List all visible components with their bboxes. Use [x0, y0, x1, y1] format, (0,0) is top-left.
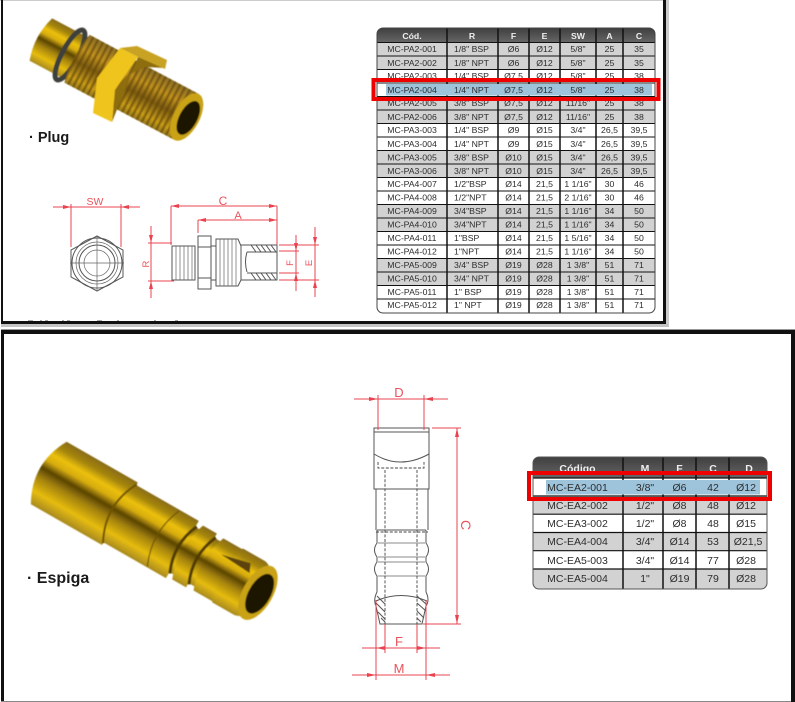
table rows: 25: [605, 85, 614, 95]
table rows: 51: [605, 300, 614, 310]
table rows: Ø12: [536, 44, 553, 54]
table rows: 25: [605, 112, 614, 122]
diagram: plug side view with dimensions: C: [219, 194, 228, 208]
table rows: Ø19: [505, 287, 522, 297]
table rows: Ø28: [736, 555, 756, 567]
table rows: 3/8" NPT: [454, 166, 490, 176]
diagram: plug side view with dimensions: [141, 194, 319, 298]
diagram: espiga section with dimensions: [352, 385, 474, 680]
table rows: Ø12: [736, 500, 756, 512]
table rows: MC-PA2-006: [387, 112, 437, 122]
table rows: 5/8": [570, 71, 586, 81]
table header: [402, 31, 643, 41]
table rows: Ø19: [670, 573, 690, 585]
table rows: 34: [605, 206, 614, 216]
panel: plug: [0, 0, 669, 327]
table rows: 38: [634, 112, 644, 122]
table rows: 50: [634, 206, 644, 216]
table rows: 34: [605, 233, 614, 243]
table rows: Ø12: [736, 482, 756, 494]
table rows: 46: [634, 179, 644, 189]
table rows: 5/8": [570, 85, 586, 95]
table rows: 3/4": [570, 166, 586, 176]
table rows: Ø12: [536, 58, 553, 68]
table rows: 21,5: [536, 246, 553, 256]
table rows: Ø15: [736, 518, 756, 530]
table rows: MC-PA2-001: [387, 44, 437, 54]
table rows: MC-PA5-009: [387, 260, 437, 270]
table rows: 77: [707, 555, 719, 567]
panel: espiga: [1, 329, 795, 702]
table rows: 3/4" BSP: [454, 260, 489, 270]
table rows: Ø28: [536, 287, 553, 297]
table rows: Ø12: [536, 112, 553, 122]
table rows: Ø10: [505, 152, 522, 162]
table rows: Ø15: [536, 139, 553, 149]
table header: R: [469, 31, 476, 41]
table rows: 3/4": [636, 536, 654, 548]
table rows: 1/8" NPT: [454, 58, 490, 68]
table rows: 1/8" BSP: [454, 44, 489, 54]
table rows: Ø12: [536, 85, 553, 95]
table rows: MC-PA4-012: [387, 246, 437, 256]
table rows: 48: [707, 500, 719, 512]
table rows: MC-EA2-002: [547, 500, 608, 512]
table rows: MC-PA2-004: [387, 85, 437, 95]
table rows: 3/4": [570, 152, 586, 162]
table rows: Ø12: [536, 98, 553, 108]
table rows: 53: [707, 536, 719, 548]
table rows: Ø14: [505, 192, 522, 202]
table: plug specifications: [377, 28, 655, 313]
table rows: 1/2"BSP: [454, 179, 487, 189]
table rows: 11/16": [566, 112, 590, 122]
table rows: 21,5: [536, 220, 553, 230]
table rows: MC-PA5-012: [387, 300, 437, 310]
table rows: 79: [707, 573, 719, 585]
table rows: Ø7,5: [504, 98, 523, 108]
table rows: Ø7,5: [504, 71, 523, 81]
table header: F: [676, 463, 683, 475]
table rows: Ø15: [536, 152, 553, 162]
table rows: MC-PA5-010: [387, 274, 437, 284]
table rows: 30: [605, 192, 614, 202]
table rows: 25: [605, 98, 614, 108]
table header: C: [709, 463, 717, 475]
table rows: [546, 480, 762, 585]
table rows: MC-EA4-004: [547, 536, 608, 548]
table rows: Ø6: [508, 58, 519, 68]
table rows: 51: [605, 287, 614, 297]
table rows: 30: [605, 179, 614, 189]
table rows: MC-PA3-005: [387, 152, 437, 162]
table rows: 11/16": [566, 98, 590, 108]
table rows: MC-EA2-001: [547, 482, 608, 494]
icon: brass hose barb fitting: [22, 437, 289, 631]
label: Plug: · Plug: [29, 130, 69, 146]
table rows: Ø14: [505, 246, 522, 256]
diagram: plug side view with dimensions: R: [141, 260, 152, 267]
table rows: 1" NPT: [454, 300, 482, 310]
table rows: 38: [634, 85, 644, 95]
table rows: Ø28: [736, 573, 756, 585]
table rows: 51: [605, 274, 614, 284]
table rows: Ø15: [536, 166, 553, 176]
table rows: MC-PA2-002: [387, 58, 437, 68]
table rows: 3/4"NPT: [454, 220, 487, 230]
table rows: 3/8" BSP: [454, 152, 489, 162]
table rows: MC-PA3-004: [387, 139, 437, 149]
table rows: 3/8" BSP: [454, 98, 489, 108]
table rows: MC-PA2-003: [387, 71, 437, 81]
table rows: Ø19: [505, 274, 522, 284]
diagram: plug end view with SW dimension: [53, 196, 140, 291]
table rows: 5/8": [570, 44, 586, 54]
table rows: 21,5: [536, 192, 553, 202]
table rows: MC-PA4-008: [387, 192, 437, 202]
table rows: Ø14: [505, 220, 522, 230]
table rows: Ø14: [505, 206, 522, 216]
table rows: 50: [634, 246, 644, 256]
table rows: MC-EA5-003: [547, 555, 608, 567]
table rows: 1 1/16": [564, 220, 592, 230]
table rows: MC-PA3-003: [387, 125, 437, 135]
table rows: 1"NPT: [454, 246, 480, 256]
table rows: 1/4" BSP: [454, 71, 489, 81]
table rows: 71: [634, 287, 644, 297]
table rows: Ø8: [672, 518, 687, 530]
table rows: [386, 44, 652, 310]
table rows: Ø14: [505, 233, 522, 243]
table rows: MC-EA5-004: [547, 573, 608, 585]
table rows: 26,5: [601, 139, 618, 149]
table rows: 35: [634, 58, 644, 68]
table rows: 3/4"BSP: [454, 206, 487, 216]
highlight box: MC-EA2-001: [529, 473, 770, 499]
table rows: 25: [605, 71, 614, 81]
table rows: 3/4": [636, 555, 654, 567]
table rows: 26,5: [601, 166, 618, 176]
table header: A: [606, 31, 613, 41]
table rows: 1/2": [636, 518, 654, 530]
diagram: plug side view with dimensions: A: [234, 210, 242, 222]
table rows: MC-PA4-009: [387, 206, 437, 216]
table rows: 71: [634, 274, 644, 284]
table rows: Ø14: [670, 555, 690, 567]
icon: brass plug fitting: [24, 13, 211, 148]
table header: F: [511, 31, 516, 41]
diagram: plug side view with dimensions: F: [285, 260, 296, 266]
table rows: Ø21,5: [734, 536, 762, 548]
table rows: 39,5: [631, 125, 648, 135]
table rows: 1" BSP: [454, 287, 482, 297]
table rows: 39,5: [631, 139, 648, 149]
table rows: 5/8": [570, 58, 586, 68]
table header: E: [542, 31, 548, 41]
table rows: 21,5: [536, 206, 553, 216]
table rows: 21,5: [536, 179, 553, 189]
table rows: 3/4" NPT: [454, 274, 490, 284]
diagram: plug end view with SW dimension: SW: [87, 196, 104, 208]
table rows: 1 3/8": [567, 260, 589, 270]
table rows: Ø7,5: [504, 112, 523, 122]
table rows: 50: [634, 220, 644, 230]
table rows: 26,5: [601, 152, 618, 162]
table rows: 1/2"NPT: [454, 192, 487, 202]
table rows: Ø9: [508, 139, 519, 149]
table rows: Ø28: [536, 300, 553, 310]
table: espiga specifications: [533, 457, 767, 589]
table rows: 1 1/16": [564, 179, 592, 189]
table rows: Ø6: [672, 482, 687, 494]
diagram: plug side view with dimensions: E: [304, 260, 315, 266]
table rows: MC-PA4-007: [387, 179, 437, 189]
table rows: Ø10: [505, 166, 522, 176]
table rows: 42: [707, 482, 719, 494]
table rows: Ø19: [505, 300, 522, 310]
table rows: 51: [605, 260, 614, 270]
table rows: 38: [634, 98, 644, 108]
table rows: Ø12: [536, 71, 553, 81]
table rows: 39,5: [631, 152, 648, 162]
table rows: 35: [634, 44, 644, 54]
table rows: Ø8: [672, 500, 687, 512]
table rows: 1 3/8": [567, 287, 589, 297]
diagram: espiga section with dimensions: F: [395, 634, 403, 649]
table rows: 1"BSP: [454, 233, 480, 243]
table header: [559, 463, 753, 475]
table rows: 3/8": [636, 482, 654, 494]
table rows: Ø28: [536, 260, 553, 270]
table rows: 26,5: [601, 125, 618, 135]
table rows: Ø7,5: [504, 85, 523, 95]
table rows: MC-EA3-002: [547, 518, 608, 530]
table rows: Ø15: [536, 125, 553, 135]
diagram: espiga section with dimensions: D: [394, 385, 404, 400]
table rows: MC-PA5-011: [388, 287, 437, 297]
diagram: espiga section with dimensions: C: [458, 520, 474, 530]
table rows: 34: [605, 220, 614, 230]
table rows: 1/4" NPT: [454, 139, 490, 149]
table rows: Ø28: [536, 274, 553, 284]
table rows: 1/4" NPT: [454, 85, 490, 95]
diagram: espiga section with dimensions: M: [394, 661, 404, 676]
table rows: MC-PA4-011: [388, 233, 437, 243]
table rows: MC-PA2-005: [387, 98, 437, 108]
table rows: 1 5/16": [564, 233, 592, 243]
table rows: 25: [605, 58, 614, 68]
table rows: 3/8" NPT: [454, 112, 490, 122]
highlight box: MC-PA2-004: [374, 80, 658, 99]
table rows: 1 1/16": [564, 206, 592, 216]
table header: M: [641, 463, 650, 475]
table rows: MC-PA4-010: [387, 220, 437, 230]
table rows: Ø14: [670, 536, 690, 548]
label: Espiga: · Espiga: [27, 570, 89, 587]
table rows: 34: [605, 246, 614, 256]
table rows: MC-PA3-006: [387, 166, 437, 176]
table rows: 2 1/16": [564, 192, 592, 202]
table rows: 39,5: [631, 166, 648, 176]
table rows: 50: [634, 233, 644, 243]
table rows: Ø6: [508, 44, 519, 54]
table rows: 3/4": [570, 125, 586, 135]
table rows: 1 1/16": [564, 246, 592, 256]
table rows: Ø19: [505, 260, 522, 270]
table rows: 1 3/8": [567, 274, 589, 284]
table rows: 1 3/8": [567, 300, 589, 310]
table rows: 1": [640, 573, 650, 585]
table header: C: [636, 31, 643, 41]
table rows: 48: [707, 518, 719, 530]
table rows: 71: [634, 260, 644, 270]
table header: Código: [559, 463, 596, 475]
table rows: 21,5: [536, 233, 553, 243]
table rows: 1/2": [636, 500, 654, 512]
table rows: 38: [634, 71, 644, 81]
table header: Cód.: [402, 31, 422, 41]
table rows: Ø14: [505, 179, 522, 189]
table rows: 71: [634, 300, 644, 310]
table rows: Ø9: [508, 125, 519, 135]
table header: D: [745, 463, 753, 475]
table rows: 25: [605, 44, 614, 54]
table rows: 3/4": [570, 139, 586, 149]
table rows: 46: [634, 192, 644, 202]
table rows: 1/4" BSP: [454, 125, 489, 135]
table header: SW: [571, 31, 586, 41]
